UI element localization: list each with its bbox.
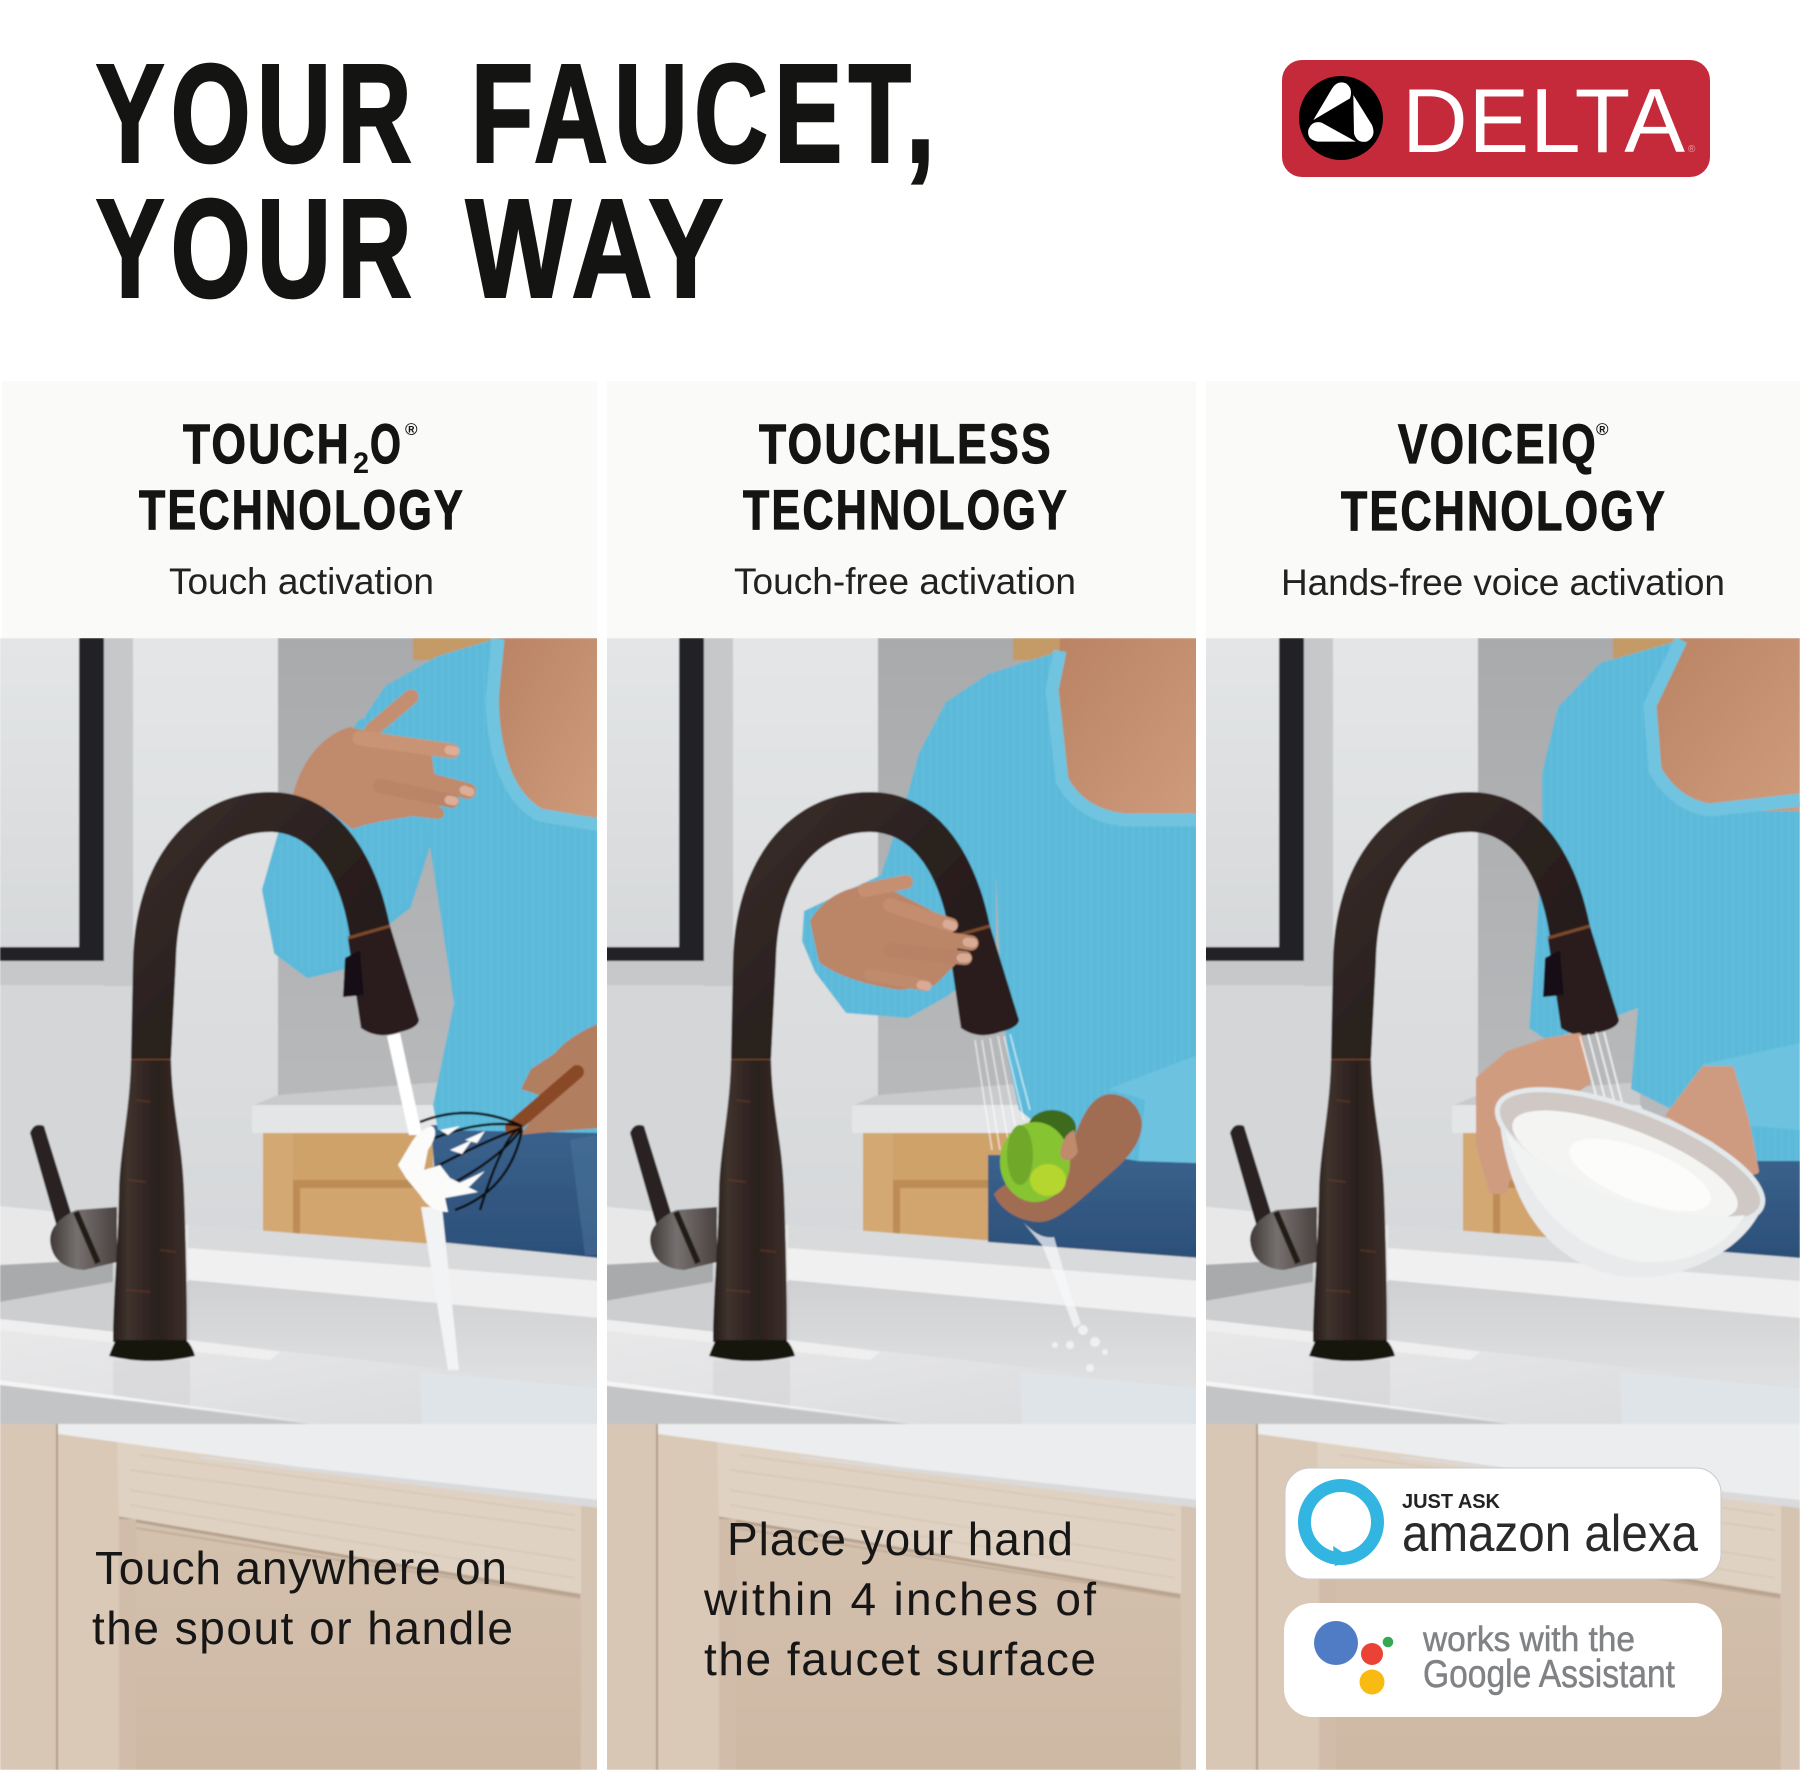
header: Touch2O: TECHNOLOGY [139, 478, 465, 541]
photo: touch activation [0, 638, 600, 1770]
header: Touch2O [2, 381, 597, 638]
panel: Touch2O technology [0, 381, 600, 1770]
lime and cupped hand [994, 1094, 1142, 1222]
caption: place your hand: the faucet surface [704, 1633, 1096, 1685]
badge: Amazon Alexa: amazon alexa [1402, 1505, 1698, 1563]
hand: raised above spout [292, 697, 470, 829]
photo: voice activation [1200, 638, 1800, 1770]
panel: Touchless technology [600, 381, 1200, 1770]
logo: Delta: ® [1688, 144, 1696, 155]
caption: touch anywhere: the spout or handle [92, 1602, 513, 1654]
header: Touchless: Touch-free activation [734, 561, 1076, 602]
header: Touchless: TOUCHLESS [759, 412, 1053, 475]
header: VoiceIQ [1206, 381, 1800, 638]
title: WAY [466, 170, 730, 326]
logo: Delta: DELTA [1402, 71, 1685, 172]
header: Touchless: TECHNOLOGY [743, 478, 1069, 541]
badge: Amazon Alexa [1285, 1468, 1721, 1579]
header: Touch2O: ® [405, 420, 418, 439]
hands holding bowl [1479, 1036, 1756, 1191]
badge: Google Assistant: works with the [1422, 1620, 1635, 1659]
whisk with foam [398, 1113, 522, 1212]
title: YOUR [96, 170, 418, 326]
header: Touch2O: 2 [353, 447, 369, 480]
header: Touch2O: TOUCH [183, 412, 351, 475]
badge: Amazon Alexa: JUST ASK [1402, 1491, 1501, 1513]
title [96, 36, 941, 326]
photo: touchless activation [600, 638, 1200, 1770]
header: VoiceIQ: Hands-free voice activation [1281, 562, 1725, 603]
caption: touch anywhere: Touch anywhere on [95, 1542, 507, 1594]
header: VoiceIQ: VOICEIQ [1398, 412, 1598, 475]
caption: place your hand [703, 1513, 1096, 1685]
caption: touch anywhere [92, 1542, 513, 1654]
icon: Google dots [1314, 1621, 1393, 1694]
header: Touch2O: Touch activation [169, 561, 434, 602]
caption: place your hand: within 4 inches of [703, 1573, 1096, 1625]
title: YOUR [96, 36, 418, 192]
logo: Delta [1282, 60, 1710, 177]
header: Touch2O: O [370, 412, 403, 475]
badge: Google Assistant [1284, 1603, 1722, 1717]
header: Touchless [607, 381, 1196, 638]
icon: Alexa ring [1304, 1486, 1378, 1566]
title: FAUCET, [471, 36, 941, 192]
hand: hovering near spout [810, 882, 973, 990]
glass bowl [1494, 1086, 1766, 1271]
caption: place your hand: Place your hand [727, 1513, 1073, 1565]
panel: VoiceIQ technology [1200, 381, 1800, 1770]
header: VoiceIQ: ® [1596, 420, 1609, 439]
badge: Google Assistant: Google Assistant [1423, 1653, 1675, 1696]
header: VoiceIQ: TECHNOLOGY [1341, 479, 1667, 542]
